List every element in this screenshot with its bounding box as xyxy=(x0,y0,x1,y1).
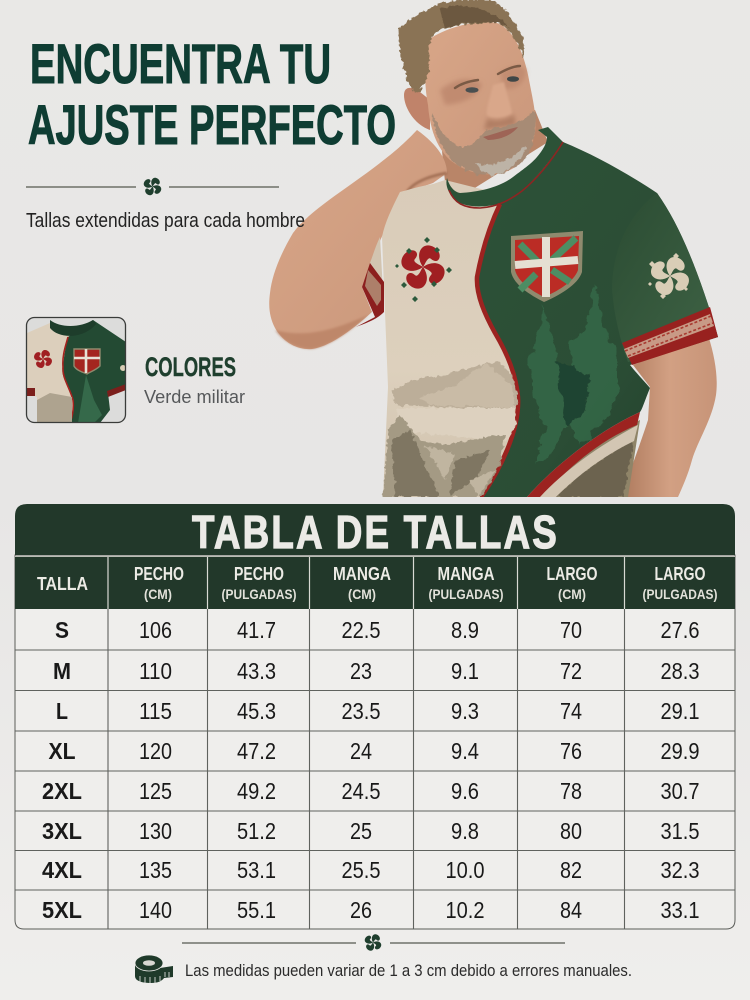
eyes and brows xyxy=(455,66,520,88)
row M: 110 xyxy=(139,658,172,684)
title: ENCUENTRA TU xyxy=(30,32,331,95)
row S: 8.9 xyxy=(451,617,479,643)
row M xyxy=(53,658,700,684)
row 3XL: 80 xyxy=(560,818,582,844)
row L: 115 xyxy=(139,698,172,724)
column headers: MANGA xyxy=(333,564,391,584)
row 4XL xyxy=(42,857,700,883)
row XL: 120 xyxy=(139,738,172,764)
green side xyxy=(477,142,718,497)
row 3XL: 31.5 xyxy=(660,818,700,844)
hem xyxy=(527,412,640,497)
row 2XL: 49.2 xyxy=(237,778,276,804)
row M: 28.3 xyxy=(660,658,700,684)
row 4XL: 82 xyxy=(560,857,582,883)
row 2XL: 24.5 xyxy=(342,778,380,804)
row 2XL: 2XL xyxy=(42,778,82,804)
hair xyxy=(398,0,524,92)
size table xyxy=(15,504,735,929)
photo: man wearing the t-shirt xyxy=(269,0,718,497)
beard xyxy=(431,112,535,175)
row 5XL: 55.1 xyxy=(237,897,276,923)
column headers: PECHO xyxy=(234,564,284,584)
row XL: XL xyxy=(48,738,76,764)
row XL: 9.4 xyxy=(451,738,479,764)
row L: 23.5 xyxy=(342,698,380,724)
column headers: (PULGADAS) xyxy=(222,587,296,602)
column headers: (CM) xyxy=(144,587,172,602)
row S: 41.7 xyxy=(237,617,276,643)
column headers: TALLA xyxy=(37,574,88,594)
row 3XL: 3XL xyxy=(42,818,82,844)
forest print xyxy=(528,285,618,465)
nose xyxy=(487,82,512,117)
head xyxy=(398,0,536,175)
thumbnail: colour swatch xyxy=(26,317,126,423)
table body xyxy=(15,555,735,929)
row 4XL: 53.1 xyxy=(237,857,276,883)
row 4XL: 4XL xyxy=(42,857,82,883)
row 3XL: 51.2 xyxy=(237,818,276,844)
divider with lauburu xyxy=(26,173,279,200)
column headers: (PULGADAS) xyxy=(642,587,718,602)
row 3XL xyxy=(42,818,700,844)
red divider xyxy=(477,204,518,497)
row 5XL: 33.1 xyxy=(660,897,700,923)
collar xyxy=(446,127,563,206)
face xyxy=(425,22,536,174)
row S: S xyxy=(55,617,69,643)
row 2XL: 78 xyxy=(560,778,582,804)
column headers: LARGO xyxy=(654,564,706,584)
row 5XL: 5XL xyxy=(42,897,82,923)
row M: 43.3 xyxy=(237,658,276,684)
row L: 29.1 xyxy=(660,698,700,724)
row M: 9.1 xyxy=(451,658,479,684)
row M: M xyxy=(53,658,71,684)
row XL: 29.9 xyxy=(660,738,700,764)
row 5XL: 10.2 xyxy=(446,897,484,923)
lauburu red xyxy=(395,237,452,302)
row L: L xyxy=(56,698,68,724)
column headers: PECHO xyxy=(134,564,184,584)
sleeve xyxy=(612,193,718,362)
row 5XL: 140 xyxy=(139,897,172,923)
colour label: COLORES xyxy=(145,352,236,382)
row XL xyxy=(48,738,700,764)
landscape print xyxy=(383,362,518,497)
subtitle: Tallas extendidas para cada hombre xyxy=(26,210,305,232)
row S: 106 xyxy=(139,617,172,643)
row 3XL: 9.8 xyxy=(451,818,479,844)
row L xyxy=(56,698,700,724)
t-shirt xyxy=(356,127,718,497)
row 5XL: 84 xyxy=(560,897,582,923)
row 4XL: 135 xyxy=(139,857,172,883)
colour label: Verde militar xyxy=(144,387,245,407)
row 2XL xyxy=(42,778,700,804)
column headers: LARGO xyxy=(546,564,598,584)
ear xyxy=(404,88,430,130)
column headers: MANGA xyxy=(438,564,494,584)
left cuff xyxy=(356,263,384,327)
row 3XL: 130 xyxy=(139,818,172,844)
colour label xyxy=(144,352,245,407)
row S: 70 xyxy=(560,617,582,643)
cream side xyxy=(382,180,530,497)
row 4XL: 25.5 xyxy=(342,857,380,883)
row L: 9.3 xyxy=(451,698,479,724)
row 3XL: 25 xyxy=(350,818,372,844)
right arm xyxy=(622,335,717,497)
left sleeve xyxy=(370,237,384,281)
row 4XL: 32.3 xyxy=(660,857,700,883)
row 5XL xyxy=(42,897,700,923)
row XL: 76 xyxy=(560,738,582,764)
lauburu cream xyxy=(648,253,689,299)
footnote: Las medidas pueden variar de 1 a 3 cm debido a errores manuales. xyxy=(185,961,632,980)
row 2XL: 125 xyxy=(139,778,172,804)
column headers xyxy=(15,556,735,609)
row 5XL: 26 xyxy=(350,897,372,923)
trousers xyxy=(557,420,640,497)
face shading xyxy=(440,66,526,130)
column headers: (PULGADAS) xyxy=(428,587,504,602)
row M: 23 xyxy=(350,658,372,684)
left arm xyxy=(269,130,447,349)
column headers: (CM) xyxy=(558,587,586,602)
column headers: (CM) xyxy=(348,587,376,602)
row S: 22.5 xyxy=(342,617,380,643)
title: AJUSTE PERFECTO xyxy=(28,93,396,156)
row 2XL: 9.6 xyxy=(451,778,479,804)
row S: 27.6 xyxy=(660,617,700,643)
table title bar xyxy=(15,504,735,558)
row L: 45.3 xyxy=(237,698,276,724)
shield xyxy=(511,231,583,302)
table title bar: TABLA DE TALLAS xyxy=(192,506,557,558)
icon: measuring tape xyxy=(135,955,173,983)
mouth xyxy=(483,127,518,140)
row M: 72 xyxy=(560,658,582,684)
footer divider with lauburu xyxy=(182,930,565,955)
row S xyxy=(55,617,700,643)
neck xyxy=(442,110,547,188)
row 4XL: 10.0 xyxy=(446,857,484,883)
row XL: 47.2 xyxy=(237,738,276,764)
row XL: 24 xyxy=(350,738,372,764)
row 2XL: 30.7 xyxy=(660,778,700,804)
row L: 74 xyxy=(560,698,582,724)
title xyxy=(28,32,396,156)
right cuff xyxy=(622,307,718,365)
